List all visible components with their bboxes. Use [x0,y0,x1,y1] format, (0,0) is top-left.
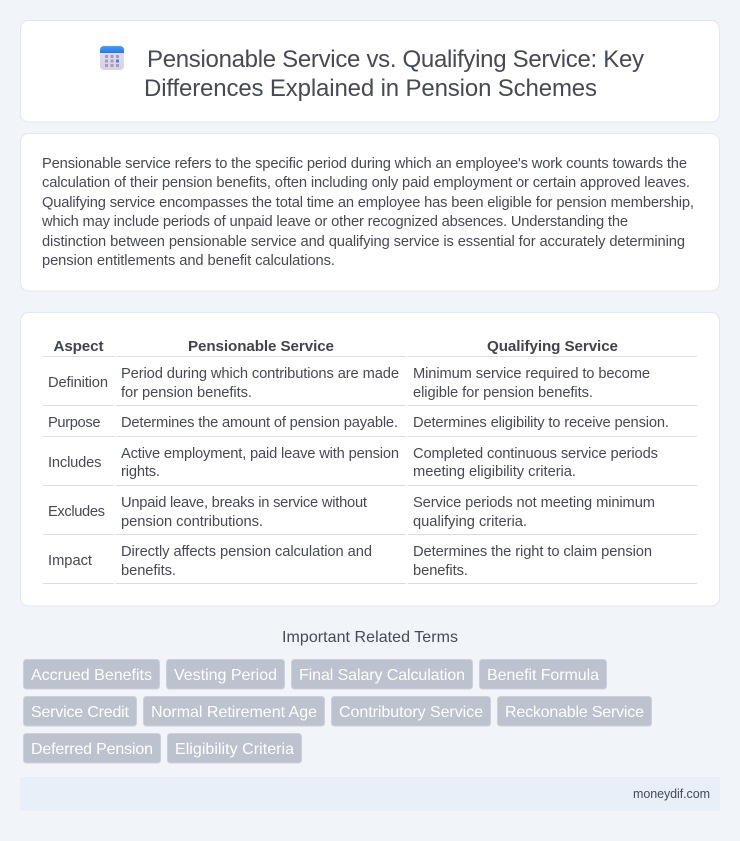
row: excludes: qualifying criteria. [413,514,527,530]
title: Differences Explained in Pension Schemes [144,75,597,102]
row: excludes: Excludes [48,504,105,520]
row: purpose: Purpose [48,415,100,431]
tag: service credit: Service Credit [31,704,130,721]
table header row: Pensionable Service [188,338,334,355]
text block: definition paragraph: Pensionable service refers to the specific period during which an employee's work counts towards the [42,156,687,172]
tag: vesting period [166,660,284,689]
row: definition: Definition [48,375,108,391]
row: excludes: Unpaid leave, breaks in service without [121,495,367,511]
tag: deferred pension [24,734,160,763]
text block: definition paragraph: Qualifying service encompasses the total time an employee has been eligible for pension membership, [42,195,694,211]
panel: intro paragraph [20,134,720,291]
row: purpose [43,415,697,437]
row: excludes [43,495,697,535]
table header row [43,338,697,357]
table header row: Qualifying Service [487,338,618,355]
panel: related term tags [24,660,652,763]
tag: contributory service [332,696,490,726]
row: includes: meeting eligibility criteria. [413,464,576,480]
tag: reckonable service [498,696,652,726]
row: definition: eligible for pension benefits. [413,385,593,401]
row: includes [43,446,697,486]
tag: benefit formula [480,660,606,689]
tag: accrued benefits: Accrued Benefits [31,667,152,684]
row: definition: Period during which contributions are made [121,366,399,382]
text block: definition paragraph: pension entitlements and benefit calculations. [42,253,335,269]
row: definition: Minimum service required to become [413,366,650,382]
panel: comparison table [20,312,720,606]
row: includes: rights. [121,464,160,480]
tag: benefit formula: Benefit Formula [487,667,599,684]
row: impact: Determines the right to claim pension [413,544,652,560]
icon: calendar [100,46,124,70]
row: impact: benefits. [413,563,468,579]
tag: contributory service: Contributory Service [339,704,483,721]
row: definition [43,366,697,406]
tag: eligibility criteria: Eligibility Criteria [175,741,294,758]
row: definition: for pension benefits. [121,385,252,401]
row: impact: Impact [48,553,92,569]
row: impact: Directly affects pension calculation and [121,544,372,560]
table header row: Aspect [54,338,104,355]
row: includes: Completed continuous service periods [413,446,658,462]
tag: vesting period: Vesting Period [174,667,277,684]
row: excludes: Service periods not meeting minimum [413,495,655,511]
tag: normal retirement age [144,696,324,726]
text block: definition paragraph [41,156,694,269]
title [144,46,644,102]
tag: normal retirement age: Normal Retirement Age [151,704,317,721]
tag: eligibility criteria [168,734,302,763]
footer bar [20,777,720,811]
text block: definition paragraph: distinction between pensionable service and qualifying service is essential for accurately determining [42,234,685,250]
row: includes: Active employment, paid leave with pension [121,446,399,462]
text block: definition paragraph: which may include periods of unpaid leave or other recognized absences. Understanding the [41,214,628,230]
panel: title header [20,20,720,122]
row: includes: Includes [48,455,102,471]
row: impact: benefits. [121,563,176,579]
row: excludes: pension contributions. [121,514,263,530]
tag: accrued benefits [24,660,160,689]
row: impact [43,544,697,584]
text block: definition paragraph: calculation of their pension benefits, often including only paid employment or certain approved leaves. [42,175,690,191]
tag: reckonable service: Reckonable Service [505,704,644,721]
tag: deferred pension: Deferred Pension [31,741,153,758]
row: purpose: Determines eligibility to receive pension. [413,415,669,431]
tag: service credit [24,696,136,726]
tag: final salary calculation [292,660,472,689]
footer bar: moneydif.com [633,787,710,801]
tag: final salary calculation: Final Salary Calculation [299,667,465,684]
title: Pensionable Service vs. Qualifying Service: Key [147,46,644,73]
heading: important related terms: Important Related Terms [282,629,458,646]
row: purpose: Determines the amount of pension payable. [121,415,398,431]
